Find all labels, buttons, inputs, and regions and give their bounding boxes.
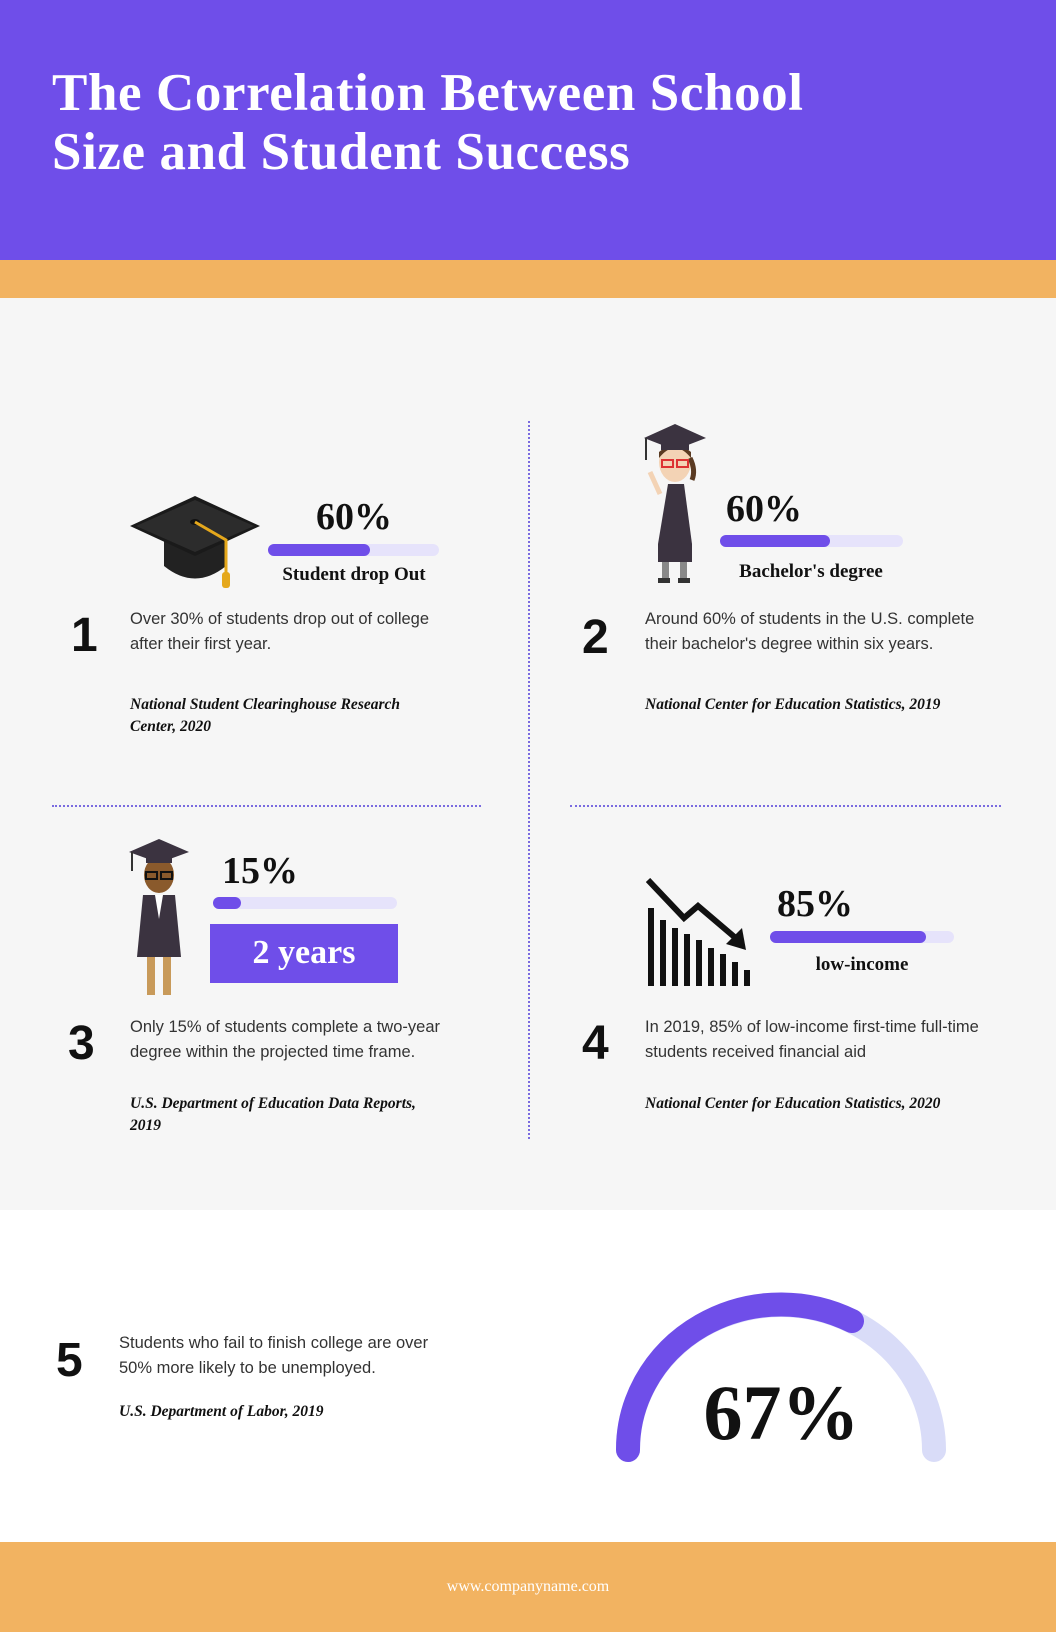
icon: graduate girl [644,424,706,583]
source: National Center for Education Statistics, 2019 [645,696,940,713]
footer [0,1542,1056,1632]
gauge 67%: 67% [704,1369,860,1456]
footer url: www.companyname.com [447,1578,609,1595]
grey section [0,298,1056,1210]
panel 1 [71,496,439,735]
source: U.S. Department of Labor, 2019 [119,1403,324,1420]
badge: 2 years: 2 years [253,934,355,971]
number 4: 4 [582,1017,609,1070]
header [0,0,1056,260]
section 5 [56,1334,428,1420]
gauge 67% [616,1292,946,1462]
stat 85%: 85% [777,883,853,925]
badge: 2 years [210,924,398,983]
text: Around 60% of students in the U.S. complete their bachelor's degree within six years. [645,610,974,653]
text: Only 15% of students complete a two-year degree within the projected time frame. [130,1018,440,1061]
orange band [0,260,1056,298]
stat 15%: 15% [222,850,298,892]
title: Size and Student Success [52,123,630,181]
number 3: 3 [68,1017,95,1070]
icon: declining chart [646,878,750,986]
stat 60%: 60% [726,488,802,530]
icon: graduation cap [130,496,260,588]
dividers [528,421,530,1139]
source: U.S. Department of Education Data Reports, 2019 [130,1095,416,1134]
stat 60%: 60% [316,496,392,538]
number 2: 2 [582,611,609,664]
number 1: 1 [71,609,98,662]
panel 2: Bachelor's degree [739,561,883,582]
icon: graduate boy [129,839,189,995]
title [52,64,804,181]
text: In 2019, 85% of low-income first-time full-time students received financial aid [645,1018,979,1061]
source: National Center for Education Statistics, 2020 [645,1095,940,1112]
panel 2 [582,424,974,713]
panel 4: low-income [816,954,908,975]
panel 4 [582,878,979,1112]
panel 1: Student drop Out [282,564,426,585]
panel 3 [68,839,440,1134]
title: The Correlation Between School [52,64,804,122]
number 5: 5 [56,1334,83,1387]
source: National Student Clearinghouse Research Center, 2020 [130,696,400,735]
text: Over 30% of students drop out of college after their first year. [130,610,429,653]
text: Students who fail to finish college are over 50% more likely to be unemployed. [119,1334,428,1377]
